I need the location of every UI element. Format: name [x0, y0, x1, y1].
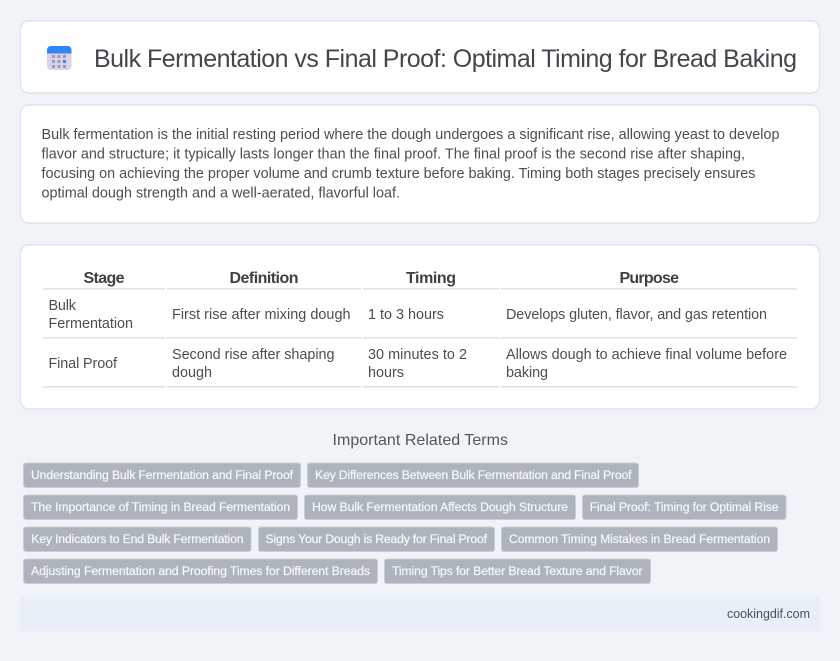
title: Bulk Fermentation vs Final Proof: Optimal Timing for Bread Baking [94, 45, 797, 73]
table row: final proof: Allows dough to achieve final volume before [506, 347, 787, 363]
tag [24, 463, 300, 488]
tag [258, 527, 494, 552]
table header: Stage [84, 270, 125, 287]
panel: introduction text [20, 105, 820, 223]
table row: bulk fermentation: Develops gluten, flavor, and gas retention [506, 307, 767, 323]
tag: Key Indicators to End Bulk Fermentation [31, 532, 243, 546]
tag: Final Proof: Timing for Optimal Rise [590, 500, 779, 514]
table row: bulk fermentation: Bulk [48, 298, 77, 314]
table row: bulk fermentation: Fermentation [48, 316, 133, 332]
table header [43, 270, 797, 290]
panel: introduction text: focusing on achieving the proper volume and crumb texture before baking. Timing both stages precisely ensures [42, 166, 756, 182]
tag: Signs Your Dough is Ready for Final Proof [266, 532, 488, 546]
tag: Timing Tips for Better Bread Texture and Flavor [392, 564, 642, 578]
table row: final proof: dough [172, 365, 212, 381]
header panel [20, 21, 820, 93]
table row: final proof: baking [506, 365, 548, 381]
table row: final proof: Second rise after shaping [172, 347, 334, 363]
tag: Understanding Bulk Fermentation and Final Proof [31, 468, 294, 482]
panel: comparison table [20, 245, 820, 409]
tag: Key Differences Between Bulk Fermentation and Final Proof [315, 468, 632, 482]
table row: final proof: 30 minutes to 2 [368, 347, 467, 363]
tag [24, 495, 298, 520]
tag [582, 495, 786, 520]
panel: introduction text: Bulk fermentation is the initial resting period where the dough undergoes a significant rise, allowing yeast to develop [42, 127, 780, 143]
table row: final proof [43, 347, 797, 388]
table row: bulk fermentation: 1 to 3 hours [368, 307, 444, 323]
icon: calendar [47, 46, 72, 70]
tag: Common Timing Mistakes in Bread Fermentation [509, 532, 770, 546]
related terms tags [24, 463, 786, 584]
heading: important related terms: Important Related Terms [332, 432, 508, 449]
footer bar [20, 597, 820, 631]
table row: bulk fermentation: First rise after mixing dough [172, 307, 350, 323]
footer source text: cookingdif.com [727, 607, 810, 621]
tag [308, 463, 638, 488]
table row: final proof: hours [368, 365, 404, 381]
tag: Adjusting Fermentation and Proofing Times for Different Breads [31, 564, 370, 578]
panel: introduction text: flavor and structure; it typically lasts longer than the final proof. The final proof is the second rise after shaping, [42, 146, 745, 162]
tag [502, 527, 778, 552]
table header: Definition [230, 270, 298, 287]
tag [24, 559, 378, 584]
tag: The Importance of Timing in Bread Fermentation [31, 500, 290, 514]
table header: Timing [406, 270, 456, 287]
panel: introduction text: optimal dough strength and a well-aerated, flavorful loaf. [42, 186, 400, 202]
tag [24, 527, 251, 552]
table row: bulk fermentation [43, 298, 797, 338]
table row: final proof: Final Proof [48, 356, 118, 372]
tag [384, 559, 650, 584]
tag [304, 495, 576, 520]
table header: Purpose [620, 270, 679, 287]
tag: How Bulk Fermentation Affects Dough Structure [312, 500, 568, 514]
